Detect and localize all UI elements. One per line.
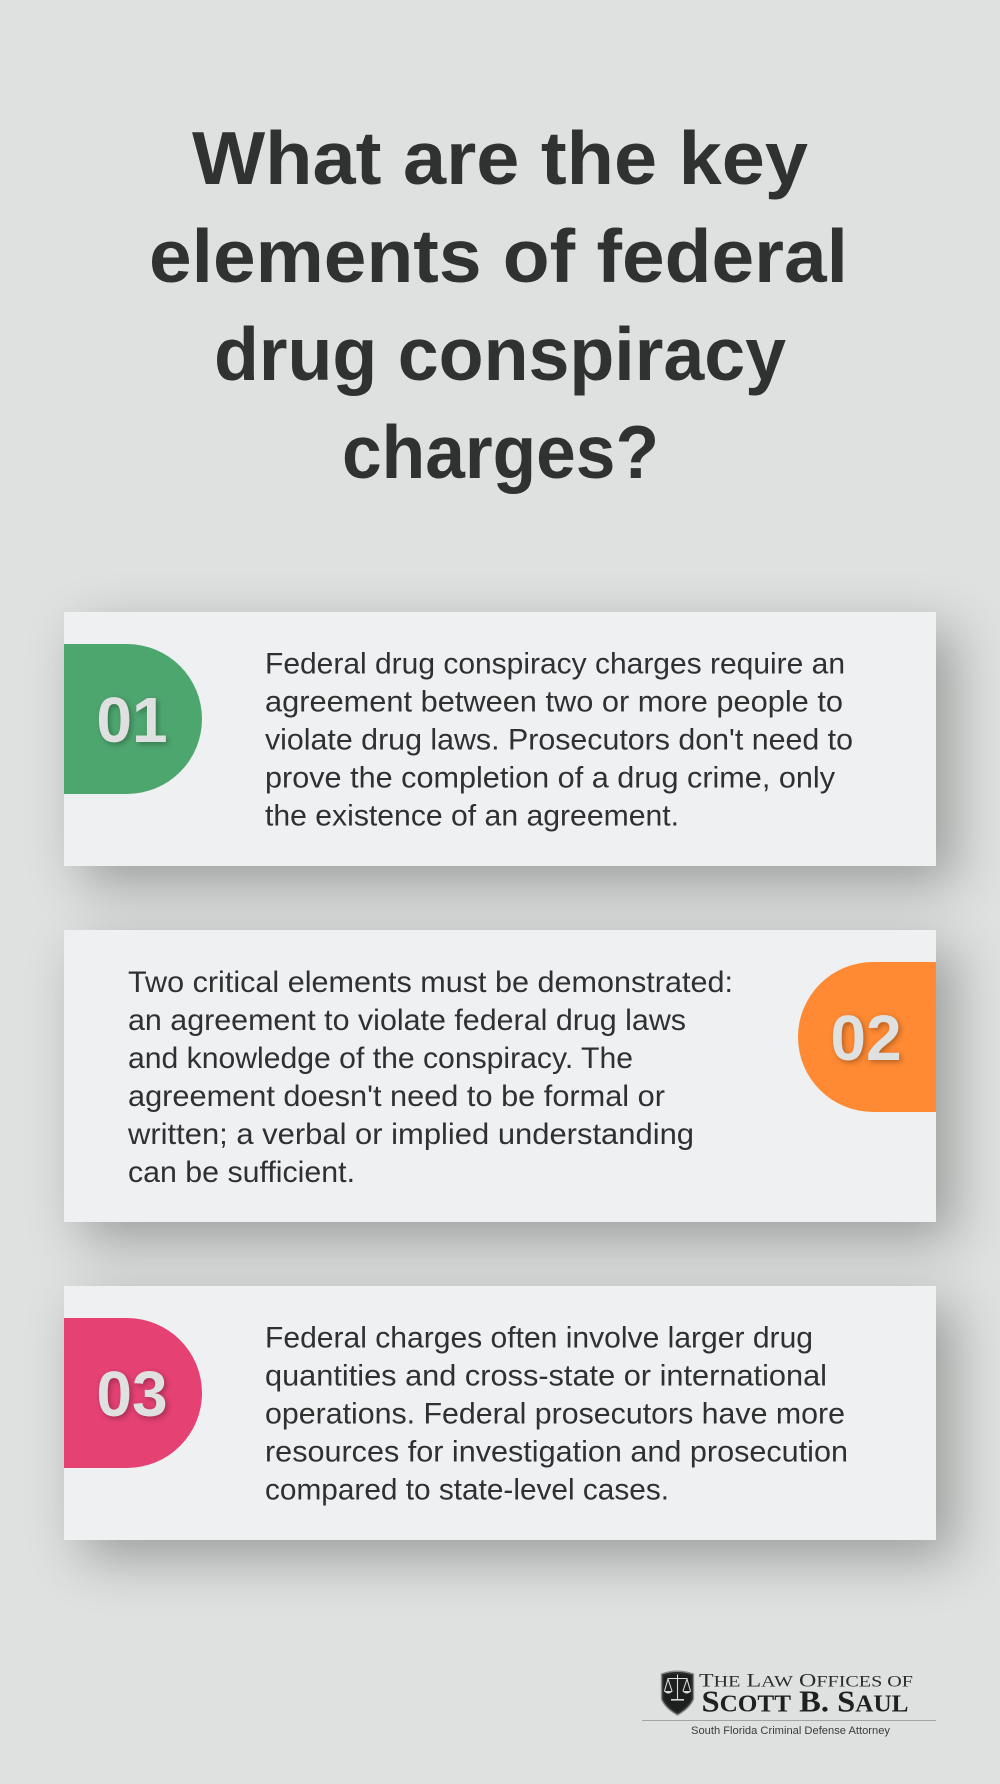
title (149, 116, 848, 494)
badge: 01: 01 (96, 684, 168, 756)
badge: 02: 02 (830, 1002, 902, 1074)
text: card 01 description: prove the completion of a drug crime, only (265, 762, 835, 794)
text: card 02 description (127, 966, 733, 1189)
text: card 03 description (265, 1322, 848, 1506)
title: What are the key (192, 116, 808, 200)
text: card 01 description: the existence of an agreement. (265, 800, 679, 832)
text: card 02 description: Two critical elements must be demonstrated: (128, 966, 733, 999)
text: card 03 description: compared to state-level cases. (265, 1474, 669, 1506)
logo tagline: South Florida Criminal Defense Attorney (691, 1725, 891, 1737)
text: card 01 description: agreement between two or more people to (265, 686, 843, 718)
title: charges? (342, 410, 659, 494)
panel: card 03 (64, 1286, 936, 1540)
text: card 02 description: agreement doesn't need to be formal or (128, 1080, 665, 1113)
divider (642, 1719, 936, 1722)
text: card 02 description: can be sufficient. (128, 1156, 355, 1189)
logo: The Law Offices of Scott B. Saul (642, 1670, 936, 1737)
text: card 02 description: and knowledge of the conspiracy. The (128, 1042, 633, 1075)
text: card 02 description: an agreement to violate federal drug laws (128, 1004, 686, 1037)
text: card 03 description: quantities and cross-state or international (265, 1360, 827, 1392)
panel: card 01 (64, 612, 936, 866)
badge: 03 (64, 1318, 202, 1468)
text: card 03 description: Federal charges often involve larger drug (265, 1322, 813, 1354)
badge: 03: 03 (96, 1358, 168, 1430)
logo line two: SCOTT B. SAUL (702, 1684, 908, 1718)
text: card 03 description: operations. Federal prosecutors have more (265, 1398, 845, 1430)
badge: 01 (64, 644, 202, 794)
badge: 02 (798, 962, 936, 1112)
logo line one: THE L AW O FFICES OF (699, 1672, 913, 1692)
title: drug conspiracy (214, 312, 786, 396)
icon: shield with scales (662, 1671, 694, 1715)
text: card 01 description: violate drug laws. Prosecutors don't need to (265, 724, 853, 756)
text: card 01 description (265, 648, 853, 832)
panel: card 02 (64, 930, 936, 1222)
text: card 01 description: Federal drug conspiracy charges require an (265, 648, 845, 680)
text: card 03 description: resources for investigation and prosecution (265, 1436, 848, 1468)
title: elements of federal (149, 214, 848, 298)
text: card 02 description: written; a verbal or implied understanding (127, 1118, 694, 1151)
